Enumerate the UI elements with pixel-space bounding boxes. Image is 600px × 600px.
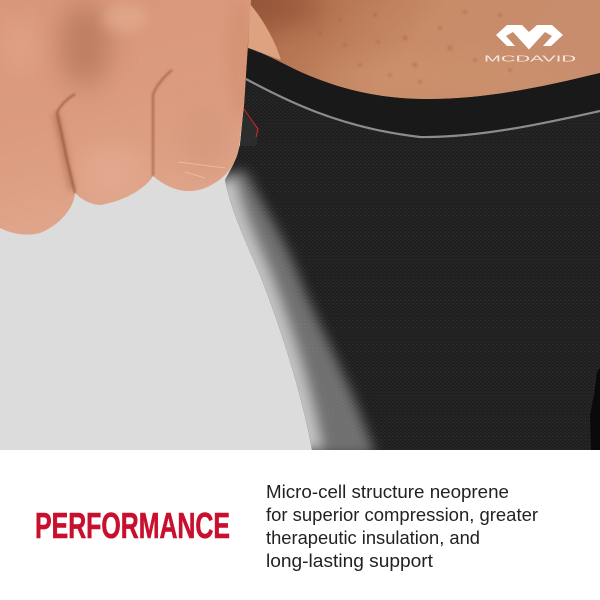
hand shading xyxy=(59,3,111,87)
red logo line xyxy=(243,108,258,137)
brace logo patch xyxy=(240,112,259,146)
finger creases xyxy=(153,70,172,176)
brace seam xyxy=(590,368,600,450)
brace stitch line xyxy=(246,79,600,137)
fingernail highlights xyxy=(178,162,225,178)
heading: performance: PERFORMANCE xyxy=(35,505,230,546)
description text: for superior compression, greater xyxy=(266,504,538,525)
photo: knee brace fabric xyxy=(220,40,600,455)
photo: thumb behind the brace xyxy=(248,4,281,60)
brand logo xyxy=(484,25,576,64)
finger crease shadows xyxy=(56,113,72,190)
description text xyxy=(266,481,538,571)
description text: long-lasting support xyxy=(266,550,433,571)
logo mark xyxy=(496,25,563,50)
logo wordmark: MCDAVID xyxy=(484,54,576,64)
photo: leg skin xyxy=(240,0,600,110)
photo: hand gripping the brace xyxy=(0,0,252,235)
panel: caption strip xyxy=(0,450,600,600)
description text: therapeutic insulation, and xyxy=(266,527,480,548)
description text: Micro-cell structure neoprene xyxy=(266,481,509,502)
background panel: photo backdrop xyxy=(0,0,600,450)
